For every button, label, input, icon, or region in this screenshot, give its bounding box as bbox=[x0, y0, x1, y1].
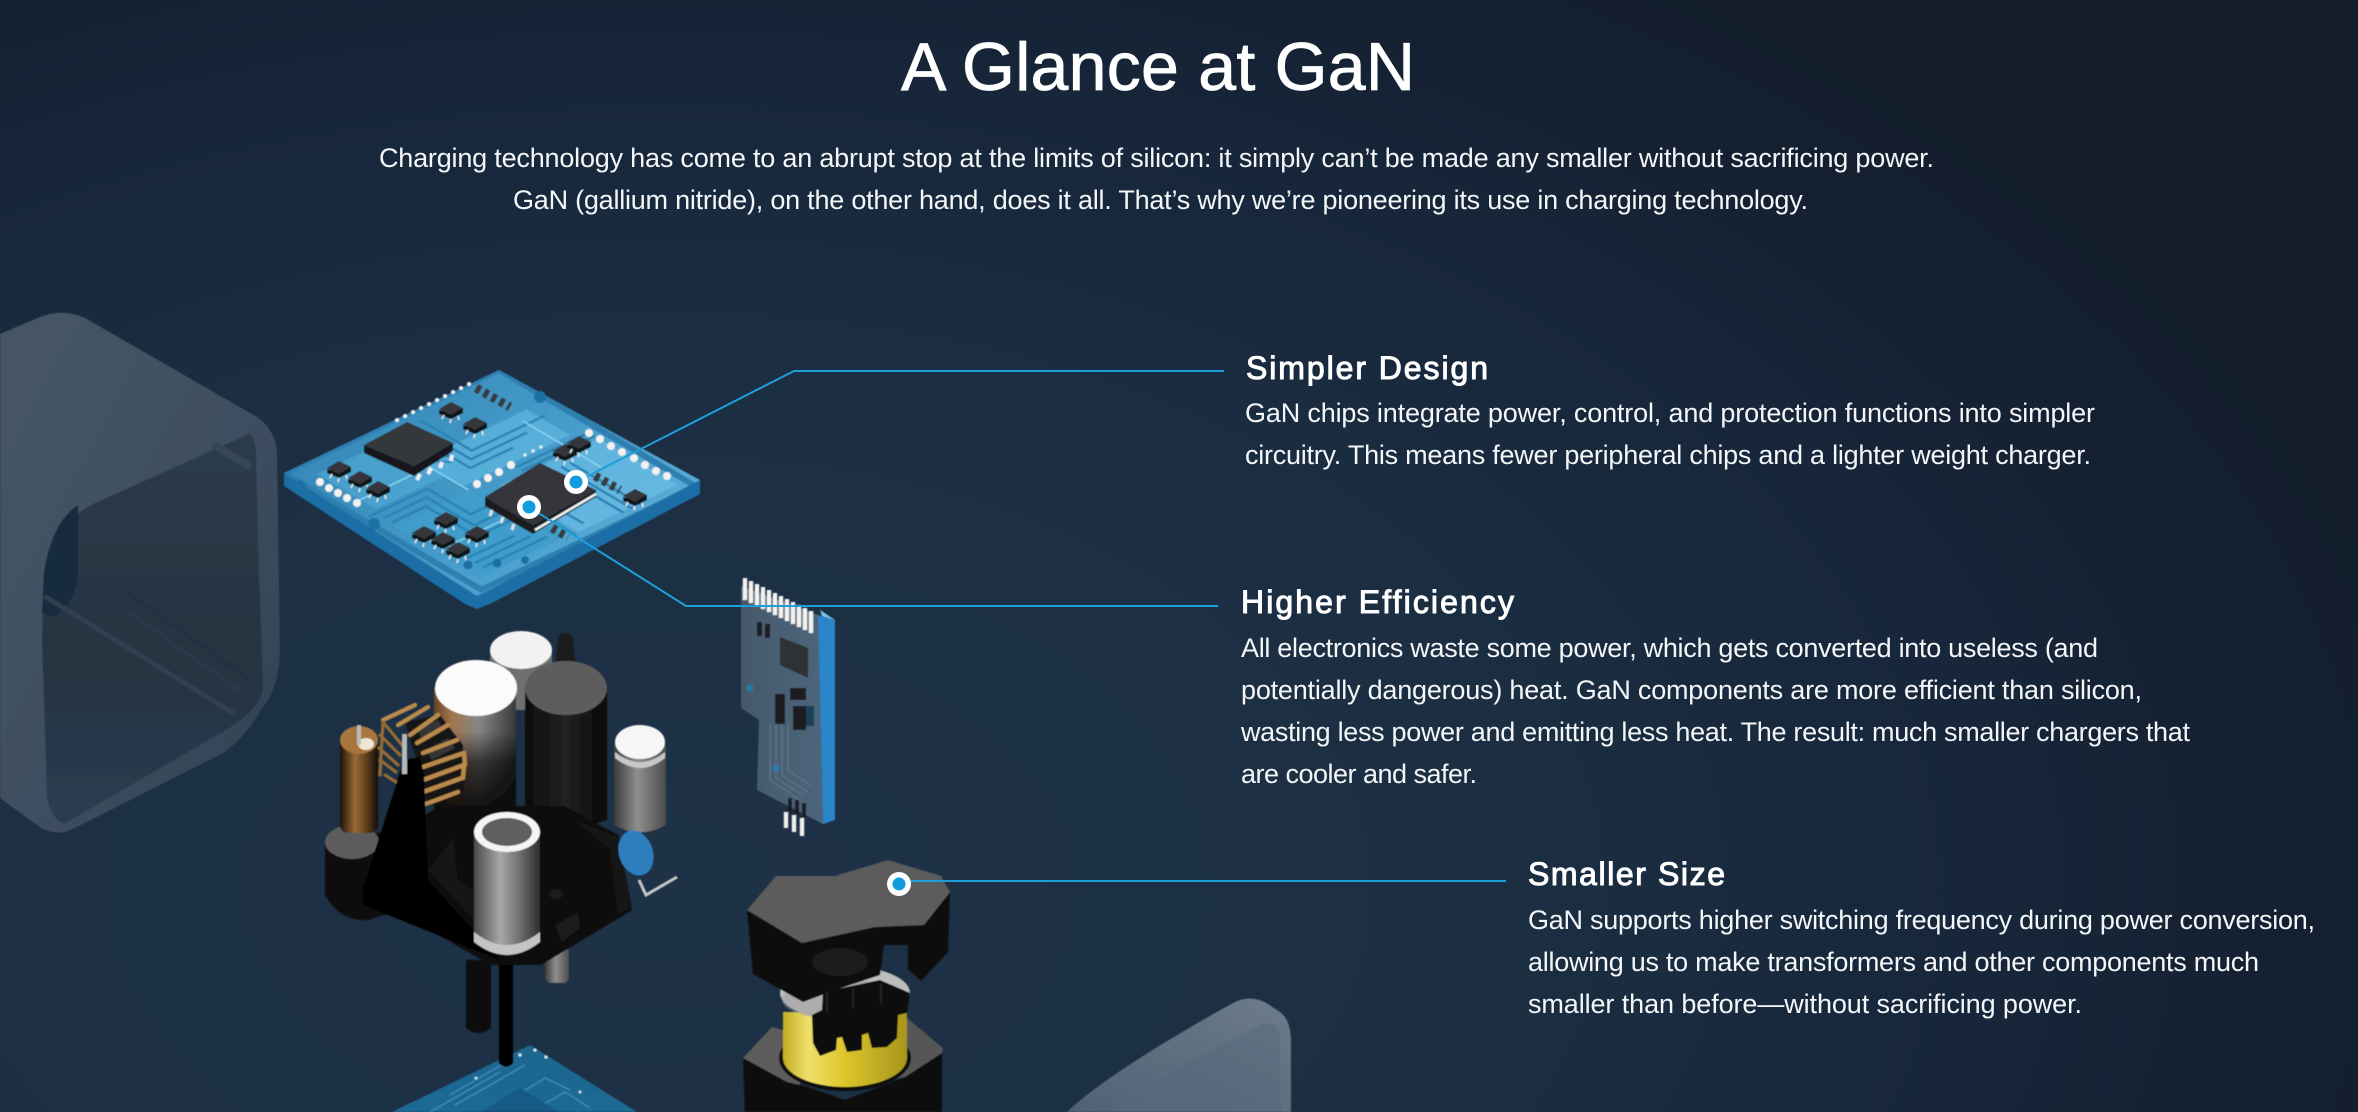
gan chip bbox=[485, 463, 596, 534]
top circuit board bbox=[284, 370, 700, 609]
connector pins bbox=[812, 980, 910, 1056]
yellow winding bbox=[783, 1012, 907, 1087]
transformer bbox=[743, 860, 950, 1112]
text block: simpler design: circuitry. This means fewer peripheral chips and a lighter weight charger. bbox=[1245, 440, 2091, 470]
large chip bbox=[364, 422, 453, 480]
lower core bbox=[743, 1018, 943, 1112]
text block: higher efficiency: All electronics waste some power, which gets converted into useless (and bbox=[1241, 633, 2098, 663]
power assembly bbox=[325, 631, 677, 1066]
intro text: GaN (gallium nitride), on the other hand, does it all. That’s why we’re pioneering its use in charging technology. bbox=[513, 185, 1808, 215]
text block: simpler design: GaN chips integrate power, control, and protection functions into simpler bbox=[1245, 398, 2095, 428]
text block: higher efficiency: wasting less power and emitting less heat. The result: much smaller chargers that bbox=[1240, 717, 2190, 747]
text block: smaller size: Smaller Size bbox=[1528, 856, 1725, 892]
connector pins bottom bbox=[786, 798, 804, 836]
copper capacitor bbox=[434, 660, 517, 812]
right capacitor bbox=[614, 725, 666, 832]
text block: higher efficiency bbox=[1240, 584, 2190, 789]
title: A Glance at GaN bbox=[901, 29, 1415, 105]
small via holes bbox=[295, 391, 546, 570]
left cylinder base bbox=[325, 825, 400, 920]
solder dots bbox=[316, 382, 671, 507]
toroid coil bbox=[379, 705, 465, 805]
wire lead bbox=[639, 877, 677, 895]
bobbin disc bbox=[780, 966, 910, 1020]
leader line: simpler design bbox=[576, 371, 1224, 482]
text block: simpler design: Simpler Design bbox=[1246, 350, 1488, 386]
marker: smaller size bbox=[887, 872, 911, 896]
intro text bbox=[379, 143, 1934, 215]
intro text: Charging technology has come to an abrupt stop at the limits of silicon: it simply can’t be made any smaller without sacrificing power. bbox=[379, 143, 1934, 173]
text block: simpler design bbox=[1245, 350, 2095, 470]
black pin bbox=[556, 633, 575, 662]
text block: smaller size: GaN supports higher switching frequency during power conversion, bbox=[1528, 905, 2315, 935]
upper core bbox=[747, 860, 950, 1002]
text block: higher efficiency: potentially dangerous) heat. GaN components are more efficient than silicon, bbox=[1241, 675, 2142, 705]
charger shell right bbox=[1067, 998, 1291, 1112]
text block: higher efficiency: Higher Efficiency bbox=[1241, 584, 1514, 620]
black base plate bbox=[363, 734, 632, 965]
vertical daughter board bbox=[741, 578, 835, 836]
marker: simpler design bbox=[564, 470, 588, 494]
bottom circuit board bbox=[392, 1045, 637, 1112]
gold capacitor bbox=[340, 725, 378, 833]
text block: smaller size bbox=[1528, 856, 2315, 1019]
text block: smaller size: smaller than before—without sacrificing power. bbox=[1528, 989, 2082, 1019]
dark capacitor bbox=[525, 661, 607, 828]
leader line: higher efficiency bbox=[529, 507, 1218, 606]
charger shell left bbox=[0, 313, 280, 833]
small components bbox=[327, 388, 647, 563]
leader line: smaller size bbox=[899, 880, 1506, 882]
blue capacitor bbox=[613, 826, 659, 880]
text block: higher efficiency: are cooler and safer. bbox=[1241, 759, 1477, 789]
legs bbox=[466, 945, 569, 1066]
back capacitor bbox=[490, 631, 552, 710]
front capacitor bbox=[474, 812, 540, 955]
marker: higher efficiency bbox=[517, 495, 541, 519]
connector pins top bbox=[745, 578, 811, 633]
text block: smaller size: allowing us to make transformers and other components much bbox=[1528, 947, 2259, 977]
